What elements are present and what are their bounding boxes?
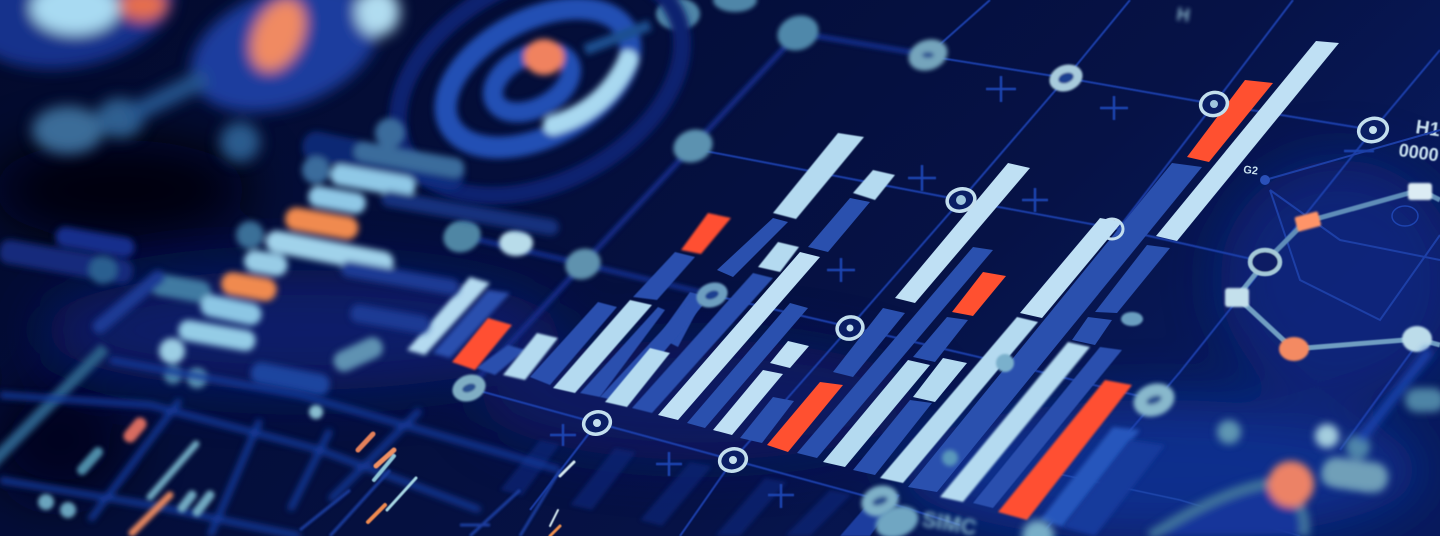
labels: 0000 xyxy=(1397,140,1440,166)
line chart: right xyxy=(1225,130,1440,361)
plus markers xyxy=(550,76,1374,508)
labels: G2 xyxy=(1243,164,1259,178)
labels: 0000 xyxy=(1321,462,1374,495)
blurred ring markers xyxy=(439,0,1179,536)
light bars xyxy=(407,41,1339,502)
orange bars xyxy=(452,80,1273,520)
blurred candlesticks: bottom left xyxy=(0,360,574,536)
labels xyxy=(920,4,1440,536)
blurred wide grid lines xyxy=(462,33,928,388)
ring half behind bar xyxy=(1101,219,1123,239)
faint columns along the lower edge xyxy=(500,440,852,536)
blurred bars: middle left xyxy=(0,118,560,465)
blue bars xyxy=(433,163,1202,536)
blurred target rings xyxy=(359,0,721,242)
blurred lower right chart xyxy=(1022,350,1440,536)
blurred rings: far top left xyxy=(0,0,400,162)
labels: H xyxy=(1175,4,1191,26)
grid lines xyxy=(469,0,1440,536)
sharp ring markers xyxy=(581,89,1390,474)
